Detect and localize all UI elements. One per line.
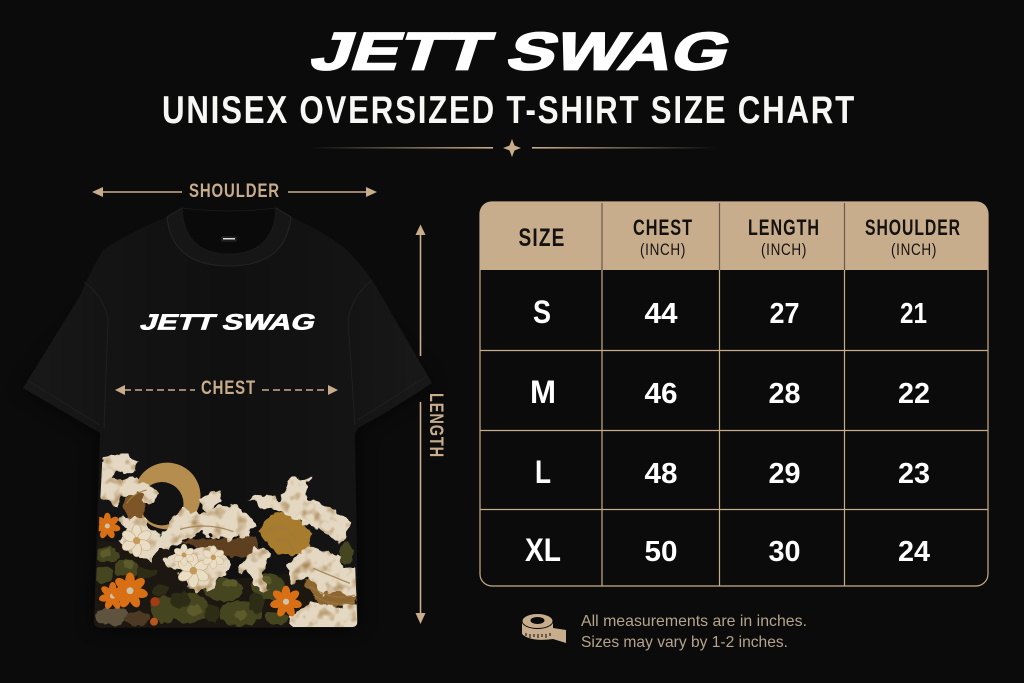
chest header bbox=[633, 215, 693, 259]
row L bbox=[535, 454, 930, 490]
brown wave bodies bbox=[122, 487, 357, 607]
row S: 44 bbox=[644, 298, 678, 330]
cream flowers bbox=[120, 525, 153, 557]
footnote: Sizes may vary by 1-2 inches. bbox=[581, 634, 788, 651]
row S: S bbox=[533, 294, 551, 330]
shoulder header: SHOULDER bbox=[865, 215, 961, 240]
row XL: XL bbox=[525, 532, 561, 568]
row M: 28 bbox=[768, 378, 800, 410]
table header band bbox=[480, 202, 988, 270]
shirt body bbox=[23, 208, 432, 628]
t-shirt bbox=[23, 208, 432, 630]
row S: 27 bbox=[770, 298, 800, 330]
cream foam bbox=[100, 454, 361, 630]
row M: 46 bbox=[644, 378, 678, 410]
shoulder measurement bbox=[92, 181, 377, 202]
length header: (INCH) bbox=[761, 240, 807, 259]
row S bbox=[533, 294, 927, 330]
shirt logo: JETT SWAG bbox=[137, 310, 319, 334]
brand logo: JETT SWAG bbox=[304, 22, 740, 81]
title divider with star bbox=[310, 139, 717, 157]
shoulder measurement: SHOULDER bbox=[189, 181, 280, 202]
row M: 22 bbox=[898, 378, 930, 410]
icon: measuring tape bbox=[522, 614, 566, 643]
footnote bbox=[581, 613, 807, 651]
title: UNISEX OVERSIZED T-SHIRT SIZE CHART bbox=[162, 89, 856, 132]
length measurement bbox=[416, 224, 446, 624]
chest header: CHEST bbox=[633, 215, 693, 240]
length header bbox=[748, 215, 820, 259]
row XL: 30 bbox=[768, 536, 800, 568]
row M: M bbox=[530, 374, 556, 410]
foam wave lines bbox=[127, 490, 355, 604]
shirt shadow bbox=[23, 300, 432, 628]
size header: SIZE bbox=[518, 224, 566, 252]
row L: L bbox=[535, 454, 551, 490]
row XL: 50 bbox=[644, 536, 678, 568]
foliage bbox=[94, 543, 354, 626]
wave and floral print bbox=[90, 454, 361, 630]
shoulder header: (INCH) bbox=[891, 240, 937, 259]
length header: LENGTH bbox=[748, 215, 820, 240]
size table bbox=[480, 202, 988, 586]
row M bbox=[530, 374, 930, 410]
chest measurement bbox=[115, 378, 338, 399]
sleeve seams bbox=[28, 280, 427, 428]
table frame and grid bbox=[480, 202, 988, 586]
row S: 21 bbox=[900, 298, 927, 330]
orange flowers bbox=[98, 512, 120, 538]
footnote: All measurements are in inches. bbox=[581, 613, 807, 630]
row L: 23 bbox=[898, 458, 930, 490]
collar bbox=[167, 208, 291, 266]
chest measurement: CHEST bbox=[201, 378, 256, 399]
row XL: 24 bbox=[898, 536, 930, 568]
length measurement: LENGTH bbox=[425, 393, 446, 458]
row L: 29 bbox=[768, 458, 800, 490]
sun ring bbox=[134, 463, 201, 529]
row L: 48 bbox=[644, 458, 678, 490]
shoulder header bbox=[865, 215, 961, 259]
chest header: (INCH) bbox=[640, 240, 686, 259]
dark ground bbox=[106, 542, 342, 627]
row XL bbox=[525, 532, 930, 568]
